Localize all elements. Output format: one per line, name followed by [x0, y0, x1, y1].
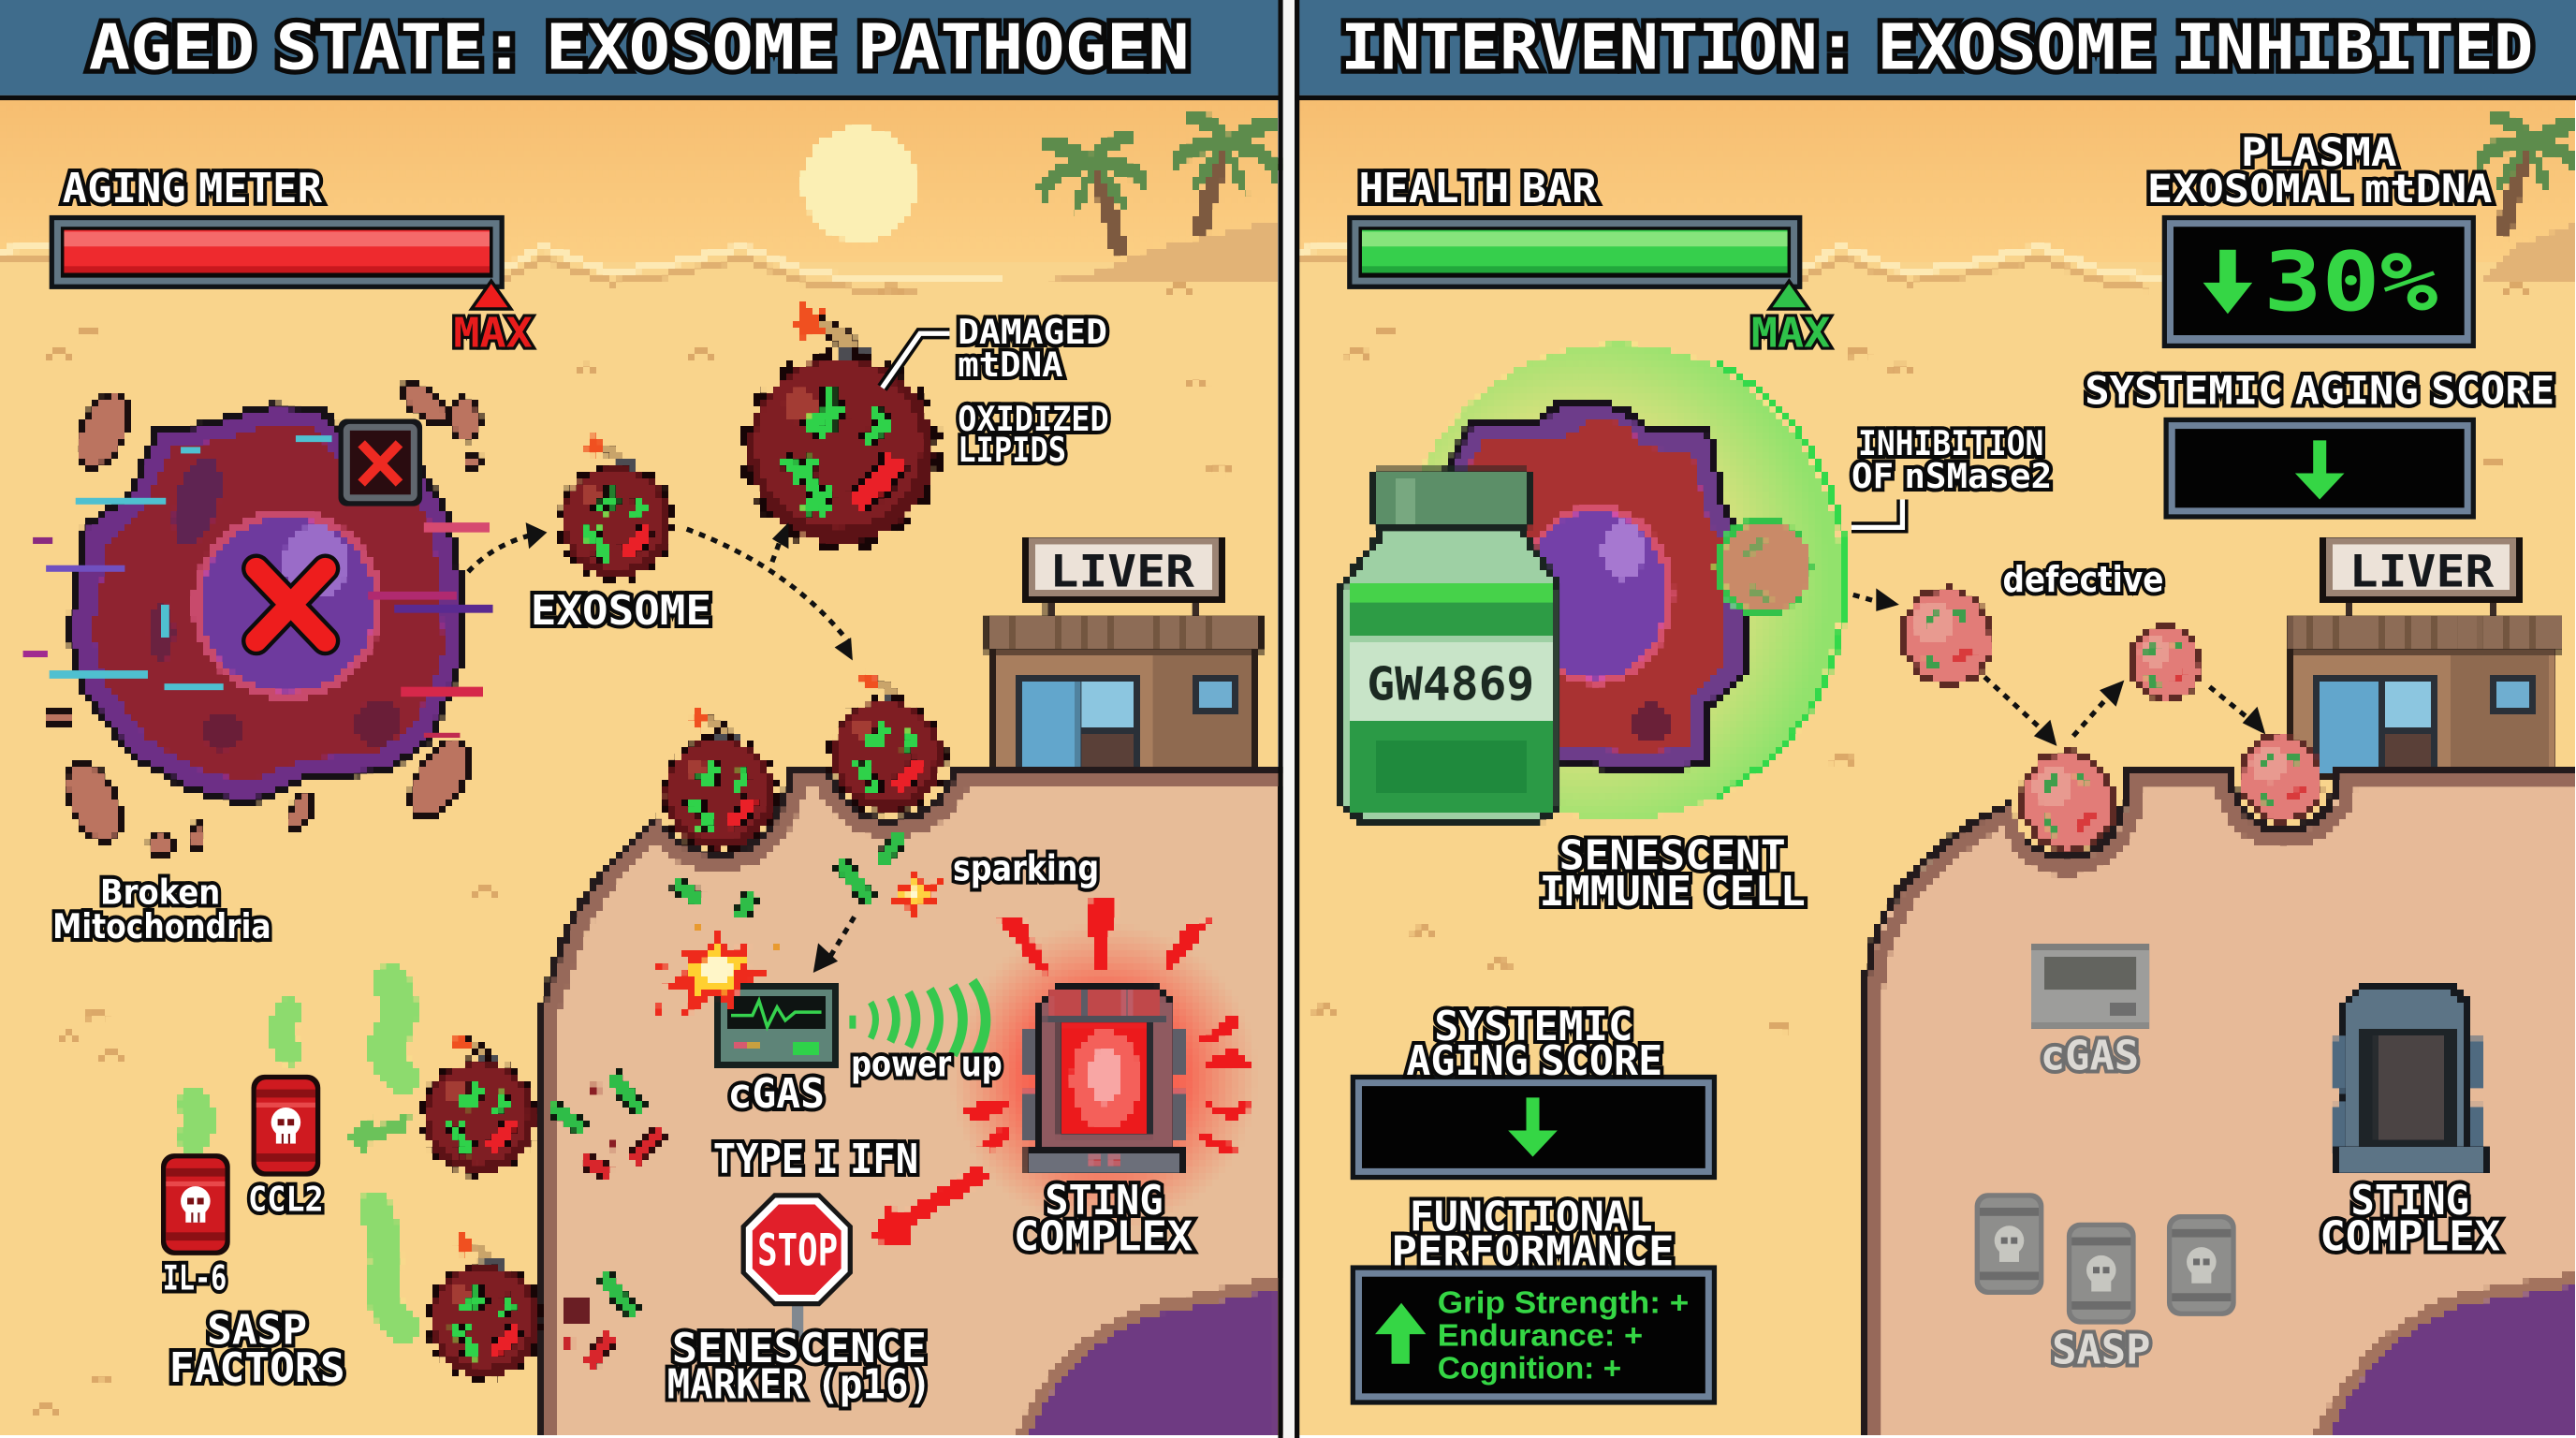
label: STOP: STOP	[757, 1225, 838, 1276]
icon: mtDNA fragments	[552, 833, 900, 1367]
label: systemic aging score upper: SYSTEMIC AGING SCORE	[2085, 368, 2554, 414]
icon: glitch bars	[23, 435, 493, 738]
label: mitochondria: Mitochondria	[52, 906, 271, 946]
icon: toxic wisps	[194, 983, 404, 1328]
callout pointer: damaged mtDNA	[882, 333, 949, 388]
label: plasma: PLASMA	[2241, 129, 2397, 175]
icon: red X on nucleus	[256, 568, 326, 640]
icon: cGAS monitor inactive	[2029, 945, 2152, 1030]
panel: liver tissue right	[1866, 770, 2576, 1438]
chart: aging meter bar	[50, 215, 505, 289]
label: marker p16: MARKER (p16)	[667, 1361, 931, 1409]
icon: tan exosome in bubble	[1714, 518, 1812, 616]
label: type I IFN: TYPE I IFN	[713, 1136, 918, 1183]
icon: palm trees	[1035, 112, 2576, 258]
arrowheads: intervention	[1876, 588, 2265, 746]
panel: functional performance: Cognition: +	[1438, 1352, 1621, 1387]
label: SASP inactive: SASP	[2052, 1327, 2150, 1374]
panel: functional performance	[1351, 1265, 1717, 1405]
label: liver left: LIVER	[1050, 547, 1194, 598]
icon: exosome releasing upper	[422, 1029, 537, 1175]
label: complex right: COMPLEX	[2320, 1213, 2500, 1261]
header: intervention banner	[1295, 0, 2576, 100]
icon: cGAS ECG trace	[731, 1001, 822, 1027]
icon: cGAS monitor active	[714, 983, 838, 1068]
building: liver right	[2285, 536, 2565, 775]
label: systemic: SYSTEMIC	[1434, 1003, 1633, 1050]
panel: functional performance: Endurance: +	[1438, 1318, 1643, 1353]
arrows: exosome paths intervention	[1853, 594, 2254, 736]
icon: IL-6 barrel	[161, 1153, 230, 1255]
label: lipids: LIPIDS	[958, 430, 1066, 470]
icon: aged senescent cell	[69, 406, 463, 805]
callout pointer: damaged mtDNA white	[882, 333, 949, 388]
label: aging meter: AGING METER	[63, 165, 323, 213]
label: IL-6: IL-6	[163, 1258, 227, 1299]
label: STING right: STING	[2351, 1177, 2469, 1225]
label: SASP: SASP	[207, 1307, 307, 1355]
label: senescence: SENESCENCE	[672, 1325, 927, 1372]
label: factors: FACTORS	[169, 1344, 345, 1392]
label: CCL2: CCL2	[248, 1180, 324, 1220]
label: defective: defective	[2002, 559, 2163, 601]
icon: defective exosome docked two	[2239, 731, 2323, 825]
icon: stop sign	[741, 1193, 853, 1338]
icon: spark small	[890, 871, 943, 920]
panel: plasma exosomal mtDNA readout	[2162, 215, 2476, 348]
label: sparking: sparking	[953, 848, 1099, 890]
label: max red: MAX	[453, 309, 533, 357]
icon: defective exosome docked one	[2020, 748, 2115, 854]
icon: green max marker	[1769, 281, 1808, 309]
panel: systemic aging score upper	[2163, 418, 2476, 520]
label: liver right: LIVER	[2349, 547, 2495, 598]
label: senescent: SENESCENT	[1559, 831, 1786, 879]
label: inhibition: INHIBITION	[1858, 423, 2043, 463]
label: GW4869: GW4869	[1367, 657, 1534, 712]
arrow: red arrow to stop sign	[871, 1164, 989, 1247]
callout bracket: inhibition white	[1852, 500, 1902, 527]
icon: red energy bolts	[961, 901, 1251, 1155]
label: mtDNA: mtDNA	[958, 345, 1063, 385]
callout bracket: inhibition	[1852, 500, 1902, 527]
label: complex left: COMPLEX	[1014, 1213, 1193, 1261]
label: functional: FUNCTIONAL	[1410, 1194, 1653, 1241]
label: cGAS inactive: cGAS	[2041, 1033, 2139, 1080]
label: broken: Broken	[100, 872, 220, 912]
icon: SASP barrels inactive	[1975, 1193, 2236, 1325]
icon: exosome docking one	[662, 705, 777, 851]
icon: defective exosome two	[2130, 623, 2203, 703]
icon: black X badge	[339, 419, 422, 506]
label: oxidized: OXIDIZED	[958, 399, 1109, 439]
icon: STING glow	[949, 922, 1258, 1231]
icon: defective exosome one	[1901, 585, 1995, 688]
icon: explosion large	[654, 923, 781, 1019]
label: aging score: AGING SCORE	[1406, 1037, 1662, 1085]
panel: aged state scene background	[0, 98, 1280, 1438]
icon: CCL2 barrel	[252, 1075, 320, 1177]
label: max green: MAX	[1751, 309, 1830, 357]
sand marks	[33, 285, 2528, 1413]
title: aged state: AGED STATE: EXOSOME PATHOGEN	[89, 11, 1190, 84]
icon: GW4869 bottle	[1339, 468, 1562, 827]
label: exosome: EXOSOME	[531, 587, 711, 635]
arrows: exosome paths aged	[468, 529, 855, 962]
icon: exosome docking two	[829, 668, 944, 814]
label: immune cell: IMMUNE CELL	[1540, 868, 1806, 916]
icon: broken mitochondria pieces	[46, 375, 483, 856]
label: power up: power up	[851, 1044, 1003, 1086]
label: damaged: DAMAGED	[958, 312, 1107, 352]
icon: STING complex active	[1023, 983, 1188, 1175]
panel: plasma exosomal mtDNA readout: 30%	[2264, 235, 2438, 330]
arrow: green SASP arrow	[345, 1112, 411, 1153]
label: exosomal mtDNA: EXOSOMAL mtDNA	[2147, 166, 2492, 212]
panel: liver tissue left	[539, 770, 1281, 1438]
label: health bar: HEALTH BAR	[1358, 165, 1598, 213]
icon: STING complex inactive	[2330, 983, 2491, 1175]
label: of nSMase2: OF nSMase2	[1852, 456, 2052, 496]
panel: intervention scene background	[1298, 98, 2576, 1438]
icon: exosome releasing lower	[427, 1232, 542, 1379]
label: cGAS: cGAS	[728, 1070, 825, 1118]
arrowheads: aged	[526, 522, 853, 973]
building: liver left	[986, 536, 1265, 775]
chart: health bar	[1347, 215, 1802, 289]
icon: enlarged exosome bomb	[744, 301, 938, 547]
panel divider	[1278, 0, 1299, 1438]
panel: functional performance: Grip Strength: +	[1438, 1285, 1689, 1320]
label: performance: PERFORMANCE	[1392, 1227, 1674, 1275]
icon: green signal waves	[853, 981, 986, 1062]
panel: systemic aging score lower	[1351, 1075, 1717, 1180]
label: STING left: STING	[1045, 1177, 1164, 1225]
icon: senescent cell protected by bubble	[1395, 344, 1846, 820]
header: aged state banner	[0, 0, 1280, 100]
icon: exosome bomb	[559, 433, 674, 580]
title: intervention: INTERVENTION: EXOSOME INHIBITED	[1340, 11, 2533, 84]
icon: red max marker	[472, 281, 511, 309]
